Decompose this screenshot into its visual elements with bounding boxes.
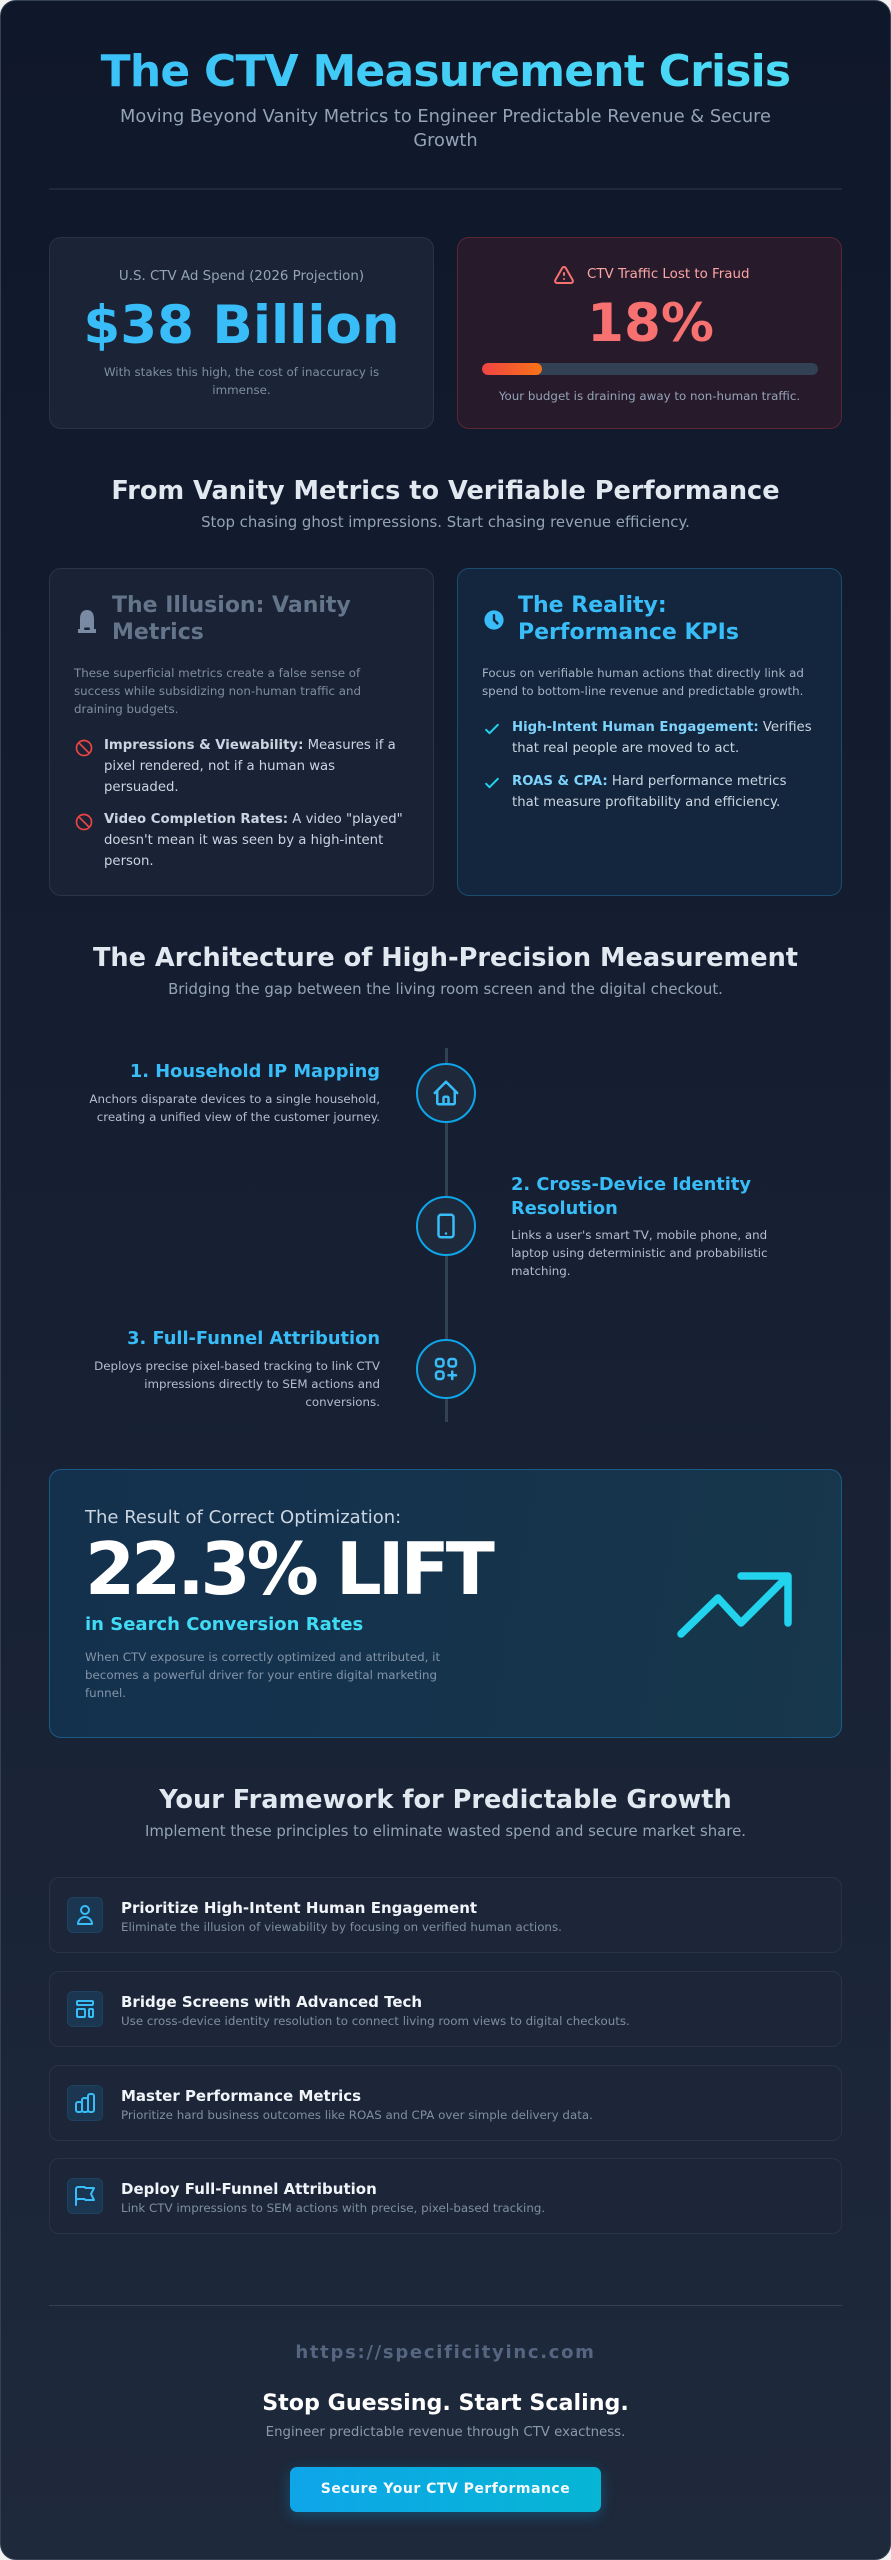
panel text: spend to bottom-line revenue and predictable growth.	[482, 684, 803, 698]
step 1 text	[89, 1061, 380, 1124]
panel heading	[518, 593, 739, 645]
list item: pixel rendered, not if a human was	[104, 759, 335, 774]
subtitle: Growth	[413, 130, 478, 151]
panel text: draining budgets.	[74, 702, 178, 716]
panel text: These superficial metrics create a false sense of	[74, 666, 360, 680]
card title: Bridge Screens with Advanced Tech	[121, 1993, 422, 2011]
icon: ban	[76, 740, 92, 756]
call to action heading: Stop Guessing. Start Scaling.	[262, 2390, 629, 2416]
result label: The Result of Correct Optimization:	[85, 1507, 401, 1528]
panel: the illusion	[49, 568, 434, 896]
list item: doesn't mean it was seen by a high-intent	[104, 833, 383, 848]
list item: that measure profitability and efficiency.	[512, 795, 780, 810]
panel text	[74, 666, 361, 716]
list item: Video Completion Rates: A video "played"	[104, 812, 403, 827]
icon: template	[67, 1991, 103, 2027]
list item	[104, 738, 396, 795]
stat note	[104, 365, 379, 397]
step description: Anchors disparate devices to a single household,	[89, 1092, 380, 1106]
step description	[89, 1092, 380, 1124]
card text: Use cross-device identity resolution to connect living room views to digital checkouts.	[121, 2014, 630, 2028]
stat note: Your budget is draining away to non-human traffic.	[499, 389, 800, 403]
section heading: architecture	[93, 943, 798, 998]
subtitle: Moving Beyond Vanity Metrics to Engineer Predictable Revenue & Secure	[120, 106, 771, 127]
section heading: framework	[145, 1785, 746, 1840]
list item: that real people are moved to act.	[512, 741, 739, 756]
step title: Resolution	[511, 1198, 618, 1219]
header	[100, 46, 790, 151]
result caption: in Search Conversion Rates	[85, 1614, 363, 1635]
stat label: U.S. CTV Ad Spend (2026 Projection)	[119, 269, 364, 284]
stat card: ad spend	[49, 237, 434, 429]
subtitle	[120, 106, 771, 151]
panel heading: Performance KPIs	[518, 620, 739, 645]
stat label: CTV Traffic Lost to Fraud	[587, 267, 749, 282]
list item: persuaded.	[104, 780, 179, 795]
card text: Link CTV impressions to SEM actions with precise, pixel-based tracking.	[121, 2201, 545, 2215]
icon: bar chart	[67, 2085, 103, 2121]
icon: warning	[554, 266, 574, 284]
list item: High-Intent Human Engagement: Verifies	[512, 720, 812, 735]
step description: Deploys precise pixel-based tracking to link CTV	[94, 1359, 380, 1373]
icon: check	[485, 724, 499, 734]
list item: ROAS & CPA: Hard performance metrics	[512, 774, 786, 789]
progress bar	[482, 363, 818, 375]
panel heading: Metrics	[112, 620, 204, 645]
step 2 text	[511, 1174, 768, 1278]
list item: person.	[104, 854, 154, 869]
step description	[94, 1359, 380, 1409]
result text: funnel.	[85, 1686, 126, 1700]
result value: 22.3% LIFT	[85, 1527, 491, 1611]
step title	[511, 1174, 751, 1219]
button: Secure Your CTV Performance	[321, 2481, 570, 2497]
panel heading: The Reality:	[518, 593, 667, 618]
list item: Impressions & Viewability: Measures if a	[104, 738, 396, 753]
step description: laptop using deterministic and probabilistic	[511, 1246, 768, 1260]
icon: ghost	[78, 610, 96, 633]
list item	[512, 720, 812, 756]
icon: user	[67, 1897, 103, 1933]
icon: ban	[76, 814, 92, 830]
panel text	[482, 666, 804, 698]
panel: the reality	[457, 568, 842, 896]
card title: Prioritize High-Intent Human Engagement	[121, 1899, 477, 1917]
icon: phone	[416, 1196, 476, 1256]
icon: check	[485, 778, 499, 788]
result text: becomes a powerful driver for your entire digital marketing	[85, 1668, 437, 1682]
panel heading	[112, 593, 351, 645]
icon: flag	[67, 2178, 103, 2214]
framework card 3	[49, 2065, 842, 2141]
result text	[85, 1650, 440, 1700]
framework card 1	[49, 1877, 842, 1953]
subheading: Stop chasing ghost impressions. Start chasing revenue efficiency.	[201, 513, 690, 531]
icon: trending up arrow	[677, 1572, 792, 1638]
call to action text: Engineer predictable revenue through CTV exactness.	[266, 2425, 625, 2440]
card text: Prioritize hard business outcomes like ROAS and CPA over simple delivery data.	[121, 2108, 593, 2122]
title: The CTV Measurement Crisis	[101, 46, 790, 97]
stat value: 18%	[587, 293, 714, 354]
icon: grid plus	[416, 1339, 476, 1399]
step title: 3. Full-Funnel Attribution	[127, 1328, 380, 1349]
step title: 1. Household IP Mapping	[130, 1061, 380, 1082]
framework card 4	[49, 2158, 842, 2234]
stat note: With stakes this high, the cost of inaccuracy is	[104, 365, 379, 379]
step description: creating a unified view of the customer journey.	[97, 1110, 380, 1124]
step description: conversions.	[305, 1395, 380, 1409]
panel: result lift	[49, 1469, 842, 1738]
stat card: fraud	[457, 237, 842, 429]
step title: 2. Cross-Device Identity	[511, 1174, 751, 1195]
section heading: vanity	[111, 476, 780, 531]
subheading: Implement these principles to eliminate wasted spend and secure market share.	[145, 1822, 746, 1840]
list item	[104, 812, 403, 869]
heading: Your Framework for Predictable Growth	[159, 1785, 732, 1815]
step description	[511, 1228, 768, 1278]
subheading: Bridging the gap between the living room screen and the digital checkout.	[168, 980, 723, 998]
step description: matching.	[511, 1264, 571, 1278]
card text: Eliminate the illusion of viewability by focusing on verified human actions.	[121, 1920, 562, 1934]
result text: When CTV exposure is correctly optimized and attributed, it	[85, 1650, 440, 1664]
footer	[262, 2342, 629, 2522]
panel text: success while subsidizing non-human traffic and	[74, 684, 361, 698]
timeline	[89, 1048, 768, 1422]
panel heading: The Illusion: Vanity	[112, 593, 351, 618]
list item	[512, 774, 786, 810]
stat value: $38 Billion	[83, 295, 400, 356]
website url: https://specificityinc.com	[295, 2342, 596, 2363]
heading: The Architecture of High-Precision Measurement	[93, 943, 798, 973]
step 3 text	[94, 1328, 380, 1409]
step description: Links a user's smart TV, mobile phone, and	[511, 1228, 767, 1242]
heading: From Vanity Metrics to Verifiable Performance	[111, 476, 780, 506]
stat note: immense.	[212, 383, 271, 397]
panel text: Focus on verifiable human actions that directly link ad	[482, 666, 804, 680]
framework card 2	[49, 1971, 842, 2047]
card title: Master Performance Metrics	[121, 2087, 361, 2105]
card title: Deploy Full-Funnel Attribution	[121, 2180, 377, 2198]
button	[290, 2467, 601, 2512]
icon: clock	[484, 610, 504, 630]
step description: impressions directly to SEM actions and	[144, 1377, 380, 1391]
icon: home	[416, 1063, 476, 1123]
